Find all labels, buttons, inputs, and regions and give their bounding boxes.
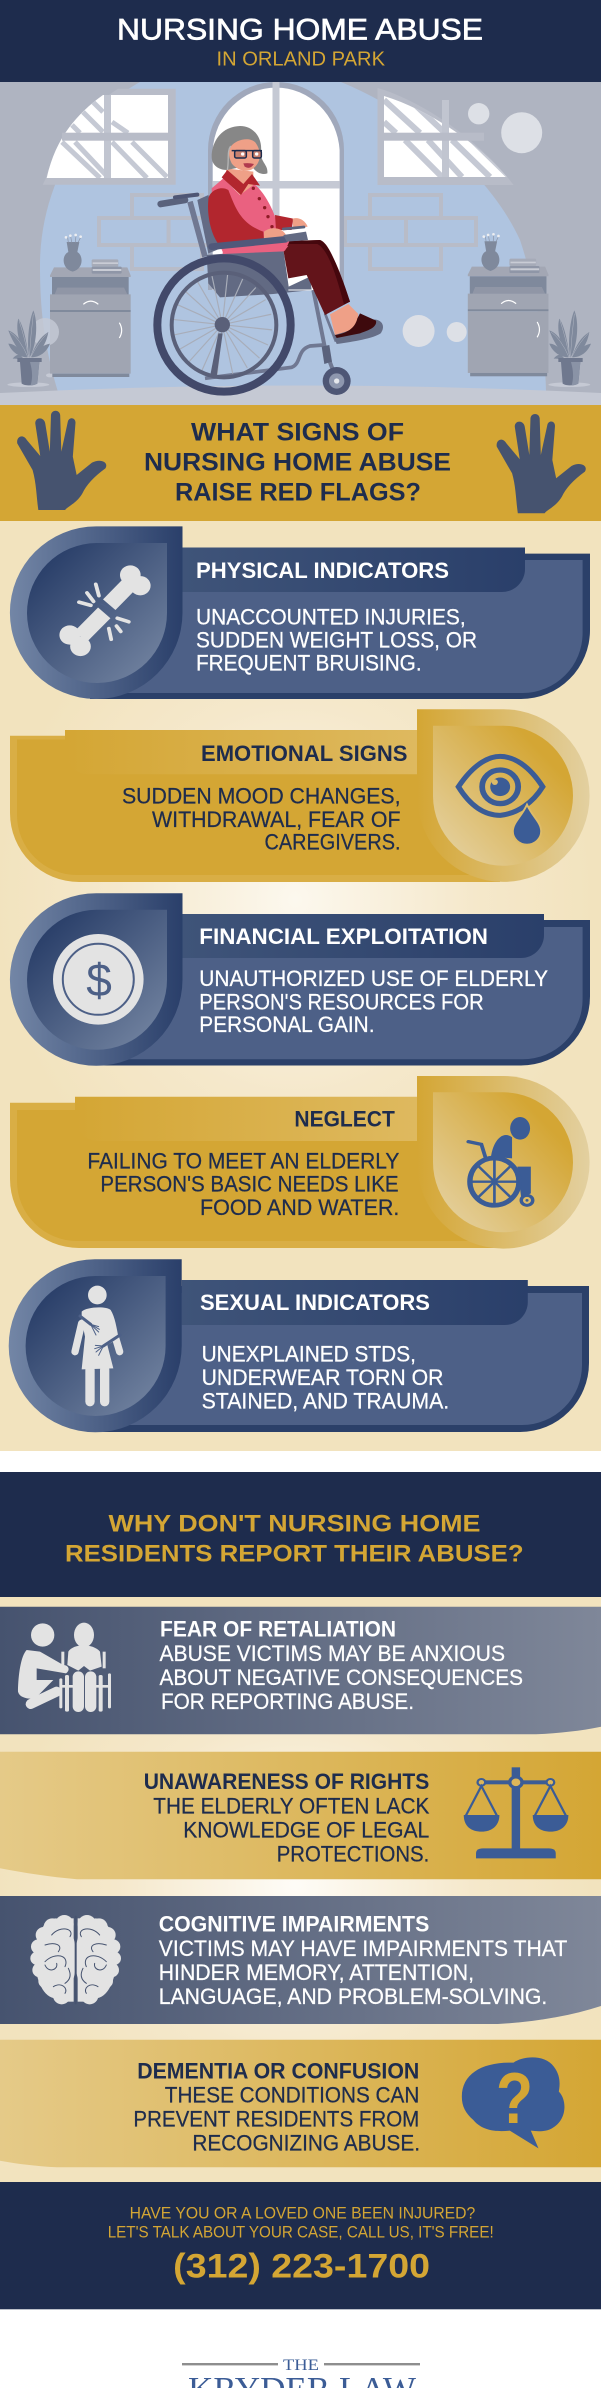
heading: UNAWARENESS OF RIGHTS bbox=[144, 1769, 429, 1794]
heading: WHAT SIGNS OF bbox=[191, 419, 404, 447]
left cabinet bbox=[46, 234, 131, 377]
icon: question speech bubble bbox=[462, 2057, 564, 2148]
heading: NURSING HOME ABUSE bbox=[144, 448, 451, 476]
body text: UNAUTHORIZED USE OF ELDERLY bbox=[199, 966, 548, 991]
body text: WITHDRAWAL, FEAR OF bbox=[152, 807, 400, 832]
heading: FINANCIAL EXPLOITATION bbox=[199, 924, 488, 949]
panel: neglect bbox=[10, 1076, 590, 1249]
icon: broken bone bbox=[59, 565, 151, 656]
heading bbox=[144, 419, 451, 506]
body text: HINDER MEMORY, ATTENTION, bbox=[159, 1960, 474, 1985]
body text: THESE CONDITIONS CAN bbox=[165, 2082, 419, 2107]
icon: dollar coin: $ bbox=[86, 954, 112, 1006]
heading: COGNITIVE IMPAIRMENTS bbox=[159, 1912, 429, 1937]
body text: PREVENT RESIDENTS FROM bbox=[133, 2106, 419, 2131]
decorative circles bbox=[403, 103, 542, 347]
right window bbox=[378, 88, 514, 185]
body text: UNACCOUNTED INJURIES, bbox=[196, 604, 466, 629]
body text: FREQUENT BRUISING. bbox=[196, 651, 422, 676]
body text bbox=[153, 1793, 430, 1866]
panel: dementia or confusion bbox=[0, 2040, 601, 2167]
icon: brain bbox=[30, 1915, 121, 2004]
body text: STAINED, AND TRAUMA. bbox=[202, 1388, 449, 1413]
big wheel bbox=[157, 258, 291, 392]
body text bbox=[133, 2082, 420, 2155]
footer call to action: LET'S TALK ABOUT YOUR CASE, CALL US, IT'S FREE! bbox=[108, 2222, 494, 2241]
panel: cognitive impairments bbox=[0, 1896, 601, 2024]
head bbox=[212, 126, 267, 174]
footer call to action bbox=[0, 2182, 601, 2309]
body text: PROTECTIONS. bbox=[277, 1841, 429, 1866]
icon: question speech bubble: ? bbox=[496, 2059, 533, 2139]
heading: RAISE RED FLAGS? bbox=[175, 478, 421, 506]
body text: ABOUT NEGATIVE CONSEQUENCES bbox=[160, 1665, 523, 1690]
body text: FOOD AND WATER. bbox=[200, 1195, 399, 1220]
body text: ABUSE VICTIMS MAY BE ANXIOUS bbox=[160, 1641, 505, 1666]
section heading: why residents don't report bbox=[0, 1472, 601, 1597]
illustration: room with woman in wheelchair bbox=[0, 82, 601, 405]
body text: VICTIMS MAY HAVE IMPAIRMENTS THAT bbox=[159, 1936, 567, 1961]
left window bbox=[43, 89, 176, 185]
body text: PERSON'S BASIC NEEDS LIKE bbox=[100, 1172, 399, 1197]
icon: woman being touched bbox=[75, 1286, 120, 1402]
panel: fear of retaliation bbox=[0, 1607, 601, 1734]
header band bbox=[0, 0, 601, 82]
heading: SEXUAL INDICATORS bbox=[200, 1290, 430, 1315]
floor bbox=[0, 386, 601, 405]
body text: SUDDEN WEIGHT LOSS, OR bbox=[196, 628, 477, 652]
logo: the kryder law firm bbox=[182, 2357, 420, 2388]
heading: PHYSICAL INDICATORS bbox=[196, 558, 449, 583]
title: NURSING HOME ABUSE bbox=[117, 14, 483, 46]
body text: THE ELDERLY OFTEN LACK bbox=[153, 1793, 430, 1818]
section heading: why residents don't report: WHY DON'T NURSING HOME bbox=[108, 1511, 480, 1538]
small wheel bbox=[323, 367, 351, 395]
body text: KNOWLEDGE OF LEGAL bbox=[183, 1817, 429, 1842]
body text: FAILING TO MEET AN ELDERLY bbox=[87, 1148, 400, 1173]
body text: SUDDEN MOOD CHANGES, bbox=[122, 784, 400, 809]
body text: FOR REPORTING ABUSE. bbox=[161, 1689, 414, 1714]
armrest bbox=[212, 239, 285, 247]
logo: the kryder law firm: THE bbox=[283, 2357, 319, 2374]
body text: CAREGIVERS. bbox=[264, 829, 400, 854]
icon: carer and wheelchair user bbox=[18, 1623, 111, 1712]
heading: FEAR OF RETALIATION bbox=[160, 1617, 396, 1642]
icon: scales of justice bbox=[464, 1767, 568, 1858]
icon: right hand bbox=[497, 414, 586, 513]
bricks bbox=[99, 195, 476, 269]
trousers bbox=[283, 240, 350, 315]
panel: physical indicators bbox=[10, 526, 590, 699]
arched window bbox=[208, 82, 344, 292]
right plant bbox=[548, 310, 591, 387]
body text: UNEXPLAINED STDS, bbox=[202, 1342, 416, 1367]
footer call to action: HAVE YOU OR A LOVED ONE BEEN INJURED? bbox=[130, 2204, 475, 2223]
body text bbox=[160, 1641, 523, 1714]
section heading: why residents don't report: RESIDENTS REPORT THEIR ABUSE? bbox=[65, 1541, 524, 1568]
icon: wheelchair user bbox=[468, 1117, 533, 1205]
body text: LANGUAGE, AND PROBLEM-SOLVING. bbox=[159, 1984, 547, 2009]
body text bbox=[87, 1148, 400, 1220]
body text bbox=[159, 1936, 567, 2009]
icon: left hand bbox=[17, 411, 106, 510]
body text: PERSON'S RESOURCES FOR bbox=[199, 989, 484, 1014]
footrest and shoe bbox=[333, 319, 383, 344]
left plant bbox=[7, 310, 59, 387]
body text bbox=[196, 604, 477, 676]
body text: UNDERWEAR TORN OR bbox=[202, 1365, 444, 1390]
wheelchair and woman bbox=[157, 126, 383, 395]
body text: RECOGNIZING ABUSE. bbox=[192, 2130, 420, 2155]
body text bbox=[202, 1342, 449, 1413]
heading: EMOTIONAL SIGNS bbox=[201, 741, 408, 766]
panel: sexual indicators bbox=[9, 1259, 589, 1432]
phone number: (312) 223-1700 bbox=[173, 2248, 430, 2286]
heading: DEMENTIA OR CONFUSION bbox=[137, 2058, 419, 2083]
panel: emotional signs bbox=[10, 709, 590, 882]
panel: financial exploitation bbox=[10, 893, 590, 1066]
panel: unawareness of rights bbox=[0, 1752, 601, 1879]
right cabinet bbox=[468, 233, 548, 376]
subtitle: IN ORLAND PARK bbox=[216, 49, 386, 71]
gold banner bbox=[0, 405, 601, 521]
body text: PERSONAL GAIN. bbox=[199, 1012, 374, 1037]
shirt bbox=[212, 178, 289, 253]
body text bbox=[122, 784, 400, 854]
body text bbox=[199, 966, 548, 1037]
icon: dollar coin bbox=[53, 934, 144, 1025]
heading: NEGLECT bbox=[294, 1107, 395, 1132]
icon: crying eye bbox=[458, 756, 543, 845]
